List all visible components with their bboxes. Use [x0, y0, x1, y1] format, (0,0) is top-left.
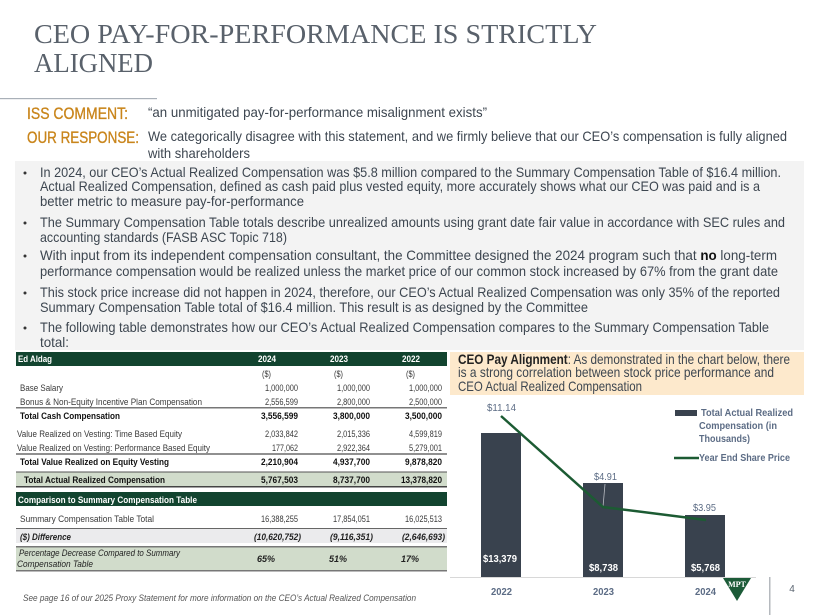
bullet: program design: With input from its independent compensation consultant, the Committee designed the 2024 program such that no long-term [40, 247, 777, 263]
compensation table: Base Salary [20, 383, 63, 393]
compensation table: 2,556,599 [265, 397, 298, 407]
bullet: table introduction [24, 319, 769, 350]
combo chart: compensation bars and share price line [450, 402, 756, 598]
bullet: program design: performance compensation would be realized unless the market price of our common stock increased by 67% from the grant date [40, 263, 778, 279]
compensation table: Total Cash Compensation [20, 411, 120, 421]
ISS comment: ISS COMMENT: [27, 104, 128, 123]
our response: OUR RESPONSE: [27, 128, 139, 147]
share price labels: $11.14 [487, 402, 516, 414]
chart legend [674, 407, 793, 464]
bar 2024 [685, 515, 725, 577]
percentage decrease row: Percentage Decrease Compared to Summary [19, 548, 180, 558]
compensation table [16, 352, 447, 572]
table header: 2023 [330, 354, 348, 364]
compensation table: 5,279,001 [409, 443, 442, 453]
compensation table: 16,025,513 [405, 514, 442, 524]
page number: 4 [789, 584, 795, 595]
bar 2022: $13,379 [483, 553, 517, 565]
comparison header [16, 492, 447, 506]
compensation table: 1,000,000 [265, 383, 298, 393]
difference row: (10,620,752) [254, 532, 301, 542]
bullet: realized versus summary compensation: better metric to measure pay-for-performance [40, 193, 304, 209]
title [34, 19, 597, 78]
title: ALIGNED [34, 48, 153, 78]
percentage decrease row: Compensation Table [17, 559, 93, 569]
percentage decrease row: 17% [401, 554, 419, 564]
compensation table: Value Realized on Vesting: Performance Based Equity [17, 443, 210, 453]
bullet: stock price outcome: Summary Compensation Table total of $16.4 million. This result is as designed by the Committee [40, 299, 588, 315]
total actual realized row: Total Actual Realized Compensation [24, 475, 165, 485]
table header: Ed Aldag [18, 354, 52, 364]
chart legend: Year End Share Price [699, 452, 790, 464]
percentage decrease row: 51% [329, 554, 347, 564]
bar 2023: $8,738 [589, 562, 618, 574]
compensation table: ($) [334, 369, 343, 379]
total actual realized row: 13,378,820 [401, 475, 442, 485]
difference row [16, 529, 447, 543]
footnote: See page 16 of our 2025 Proxy Statement for more information on the CEO’s Actual Realized Compensation [23, 593, 416, 604]
compensation table: 2,800,000 [337, 397, 370, 407]
share price labels: $4.91 [594, 471, 617, 483]
icon: MPT logo: MPT [728, 580, 747, 589]
our response [27, 128, 787, 161]
compensation table: Value Realized on Vesting: Time Based Equity [17, 429, 182, 439]
compensation table: 4,937,700 [333, 457, 370, 467]
total actual realized row: 5,767,503 [261, 475, 298, 485]
chart legend: Total Actual Realized [701, 407, 793, 419]
percentage decrease row: 65% [257, 554, 275, 564]
our response: with shareholders [147, 145, 250, 161]
x axis labels: 2023 [593, 586, 614, 598]
callout: CEO pay alignment: CEO Actual Realized Compensation [458, 378, 642, 394]
title: CEO PAY-FOR-PERFORMANCE IS STRICTLY [34, 19, 597, 49]
compensation table: 2,210,904 [261, 457, 298, 467]
bar 2023 [583, 483, 623, 577]
compensation table: 9,878,820 [405, 457, 442, 467]
difference row: (2,646,693) [402, 532, 445, 542]
bullet: unrealized amounts [24, 214, 785, 245]
share price line [501, 416, 706, 520]
compensation table: 3,500,000 [405, 411, 442, 421]
chart legend: Thousands) [699, 433, 750, 445]
x axis labels: 2024 [695, 586, 716, 598]
callout: CEO pay alignment: is a strong correlation between stock price performance and [458, 364, 774, 380]
bullet: table introduction: total: [40, 334, 69, 350]
ISS comment: “an unmitigated pay-for-performance misalignment exists” [148, 104, 487, 120]
compensation table: 1,000,000 [337, 383, 370, 393]
compensation table: 3,556,599 [261, 411, 298, 421]
ISS comment [27, 104, 487, 123]
total actual realized row [16, 472, 447, 488]
table header [16, 352, 447, 366]
comparison header: Comparison to Summary Compensation Table [18, 495, 197, 505]
compensation table: ($) [406, 369, 415, 379]
x axis labels [491, 586, 716, 598]
bullet: realized versus summary compensation [24, 164, 781, 209]
compensation table: Summary Compensation Table Total [20, 514, 154, 524]
bullet: program design [24, 247, 778, 279]
compensation table: 3,800,000 [333, 411, 370, 421]
compensation table: 17,854,051 [333, 514, 370, 524]
table header: 2024 [258, 354, 276, 364]
compensation table: 2,922,364 [337, 443, 370, 453]
x axis labels: 2022 [491, 586, 512, 598]
icon: MPT logo [723, 578, 751, 601]
bar 2022 [481, 433, 521, 577]
total actual realized row: 8,737,700 [333, 475, 370, 485]
bullet: table introduction: The following table demonstrates how our CEO’s Actual Realized Compensation compares to the Summary Compensation Table [40, 319, 769, 335]
compensation table: 2,500,000 [409, 397, 442, 407]
table header: 2022 [402, 354, 420, 364]
compensation table: 177,062 [272, 443, 298, 453]
chart legend: Compensation (in [699, 420, 777, 432]
share price labels [487, 402, 716, 514]
compensation table: 4,599,819 [409, 429, 442, 439]
difference row: (9,116,351) [330, 532, 373, 542]
compensation table: 2,015,336 [337, 429, 370, 439]
compensation table: 16,388,255 [261, 514, 298, 524]
bullet: realized versus summary compensation: Actual Realized Compensation, defined as cash paid plus vested equity, more accurately shows what our CEO was paid and is a [40, 178, 760, 194]
difference row: ($) Difference [20, 532, 71, 542]
bullet: unrealized amounts: accounting standards (FASB ASC Topic 718) [40, 229, 287, 245]
compensation table: 2,033,842 [265, 429, 298, 439]
compensation table: Total Value Realized on Equity Vesting [20, 457, 169, 467]
compensation table: ($) [262, 369, 271, 379]
share price labels: $3.95 [693, 502, 716, 514]
bar 2024: $5,768 [691, 562, 720, 574]
compensation table: Bonus & Non-Equity Incentive Plan Compensation [20, 397, 202, 407]
panel: explanation bullets [15, 161, 804, 350]
compensation table: 1,000,000 [409, 383, 442, 393]
bullet: stock price outcome [24, 284, 780, 315]
callout: CEO pay alignment [450, 351, 804, 395]
percentage decrease row [16, 546, 447, 572]
